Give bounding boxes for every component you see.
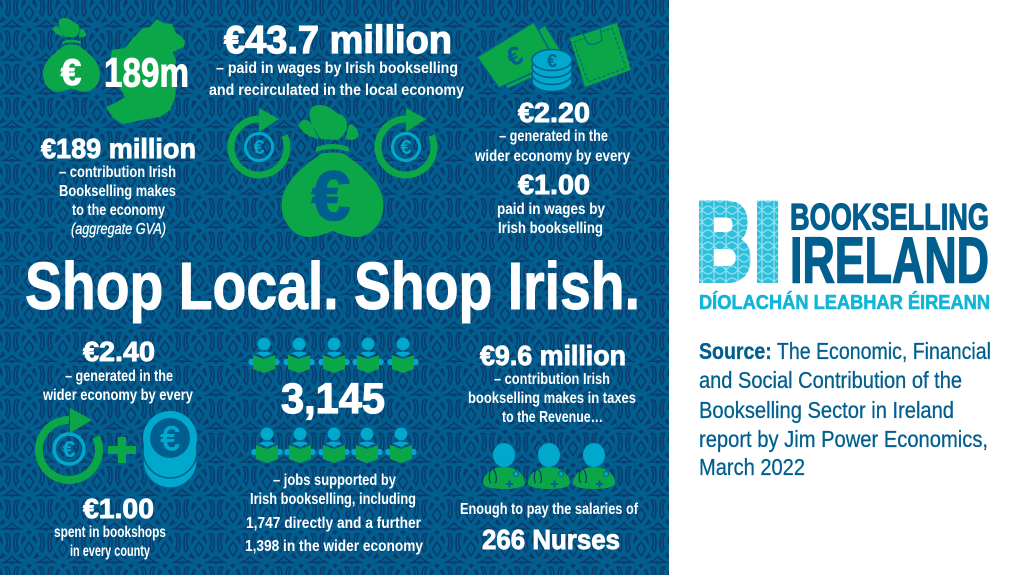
stat: 266 Nurses: 266 Nurses	[482, 524, 620, 555]
icon: euro coin stack	[143, 411, 197, 488]
heading: 2.20: €2.20	[518, 97, 590, 128]
icon: plus sign	[108, 437, 136, 463]
heading: 2.40: €2.40	[83, 336, 155, 367]
icon: small money bag: €	[61, 52, 81, 93]
panel: 189 million contribution	[41, 18, 196, 238]
heading: 43.7 million: €43.7 million	[224, 19, 452, 62]
text: taxes description: to the Revenue…	[502, 409, 603, 426]
stat: 189m: 189m	[104, 50, 189, 96]
text: generated description: – generated in the	[499, 128, 608, 145]
panel: patterned infographic background	[0, 0, 669, 575]
icon: circular arrow with euro	[39, 408, 99, 480]
text: generated description	[474, 128, 630, 165]
icon: small money bag	[43, 18, 100, 93]
text block: source: March 2022	[699, 454, 805, 480]
text: generated description: wider economy by every	[42, 387, 193, 404]
icon: bottom row of readers	[251, 428, 417, 463]
text block: source: and Social Contribution of the	[699, 367, 962, 393]
text: spent in bookshops: in every county	[70, 543, 150, 560]
heading: 1.00: €1.00	[518, 169, 590, 200]
text: taxes description: bookselling makes in taxes	[468, 390, 636, 407]
text: contribution description: to the economy	[72, 202, 165, 219]
title: Shop Local. Shop Irish.: Shop Local. Shop Irish.	[25, 249, 640, 324]
text: taxes description: – contribution Irish	[494, 371, 610, 388]
text: contribution description: (aggregate GVA)	[71, 221, 166, 238]
icon: euro coin stack: €	[161, 420, 180, 458]
icon: banknotes: €	[502, 39, 527, 73]
text: jobs description: 1,747 directly and a further	[246, 515, 421, 532]
icon: coin stack	[532, 50, 572, 92]
text: wages description: and recirculated in the local economy	[209, 82, 464, 99]
icon: wallet	[570, 23, 631, 87]
panel: 2.20 multiplier	[474, 22, 631, 237]
stat: 3,145: 3,145	[281, 375, 385, 423]
logo: Bookselling Ireland	[696, 180, 990, 314]
logo mark: BI: B	[696, 180, 752, 304]
text: spent in bookshops: spent in bookshops	[54, 524, 166, 541]
panel: 9.6 million taxes	[460, 340, 639, 555]
icon: right circular arrow with euro: €	[400, 137, 412, 159]
text: wages description: – paid in wages by Irish bookselling	[216, 60, 458, 77]
icon: circular arrow with euro: €	[63, 436, 76, 462]
icon: three nurses	[483, 443, 615, 489]
text: wages paid description	[497, 201, 605, 237]
text: jobs description: 1,398 in the wider economy	[245, 538, 423, 555]
heading: 1.00: €1.00	[83, 493, 154, 524]
icon: large money bag: €	[312, 157, 350, 235]
text: jobs description	[245, 472, 423, 555]
text: jobs description: – jobs supported by	[273, 472, 396, 489]
text: spent in bookshops	[54, 524, 166, 560]
text block: source: report by Jim Power Economics,	[699, 426, 988, 452]
text: contribution description	[59, 164, 176, 238]
logo text: Irish name: DÍOLACHÁN LEABHAR ÉIREANN	[699, 291, 990, 314]
text: wages description	[209, 60, 464, 99]
text: wages paid description: Irish bookselling	[498, 220, 603, 237]
text block: source: Bookselling Sector in Ireland	[699, 397, 954, 423]
text: taxes description	[468, 371, 636, 426]
text block: source	[699, 338, 991, 480]
heading: 189 million: €189 million	[41, 133, 196, 164]
panel: 43.7 million wages	[209, 19, 464, 237]
text: contribution description: Bookselling makes	[59, 183, 176, 200]
panel: 2.40 spend multiplier	[39, 336, 197, 560]
icon: banknotes	[477, 22, 568, 89]
text: generated description	[42, 368, 193, 404]
text: contribution description: – contribution Irish	[59, 164, 176, 181]
icon: top row of readers	[248, 338, 419, 373]
heading: 9.6 million: €9.6 million	[480, 340, 626, 371]
icon: right circular arrow with euro	[378, 108, 434, 175]
text: jobs description: Irish bookselling, including	[250, 491, 416, 508]
icon: map of Ireland	[106, 19, 185, 124]
text: salaries line: Enough to pay the salaries of	[460, 501, 639, 518]
panel: 3,145 jobs	[245, 338, 423, 555]
text block: source: Source: The Economic, Financial	[699, 338, 991, 364]
logo mark: BI: I	[752, 180, 783, 304]
icon: left circular arrow with euro	[231, 108, 287, 175]
text: generated description: – generated in the	[65, 368, 173, 385]
icon: coin stack: €	[547, 51, 557, 71]
text: generated description: wider economy by every	[474, 148, 630, 165]
icon: left circular arrow with euro: €	[253, 137, 265, 159]
icon: large money bag	[282, 105, 384, 237]
text: wages paid description: paid in wages by	[497, 201, 605, 218]
